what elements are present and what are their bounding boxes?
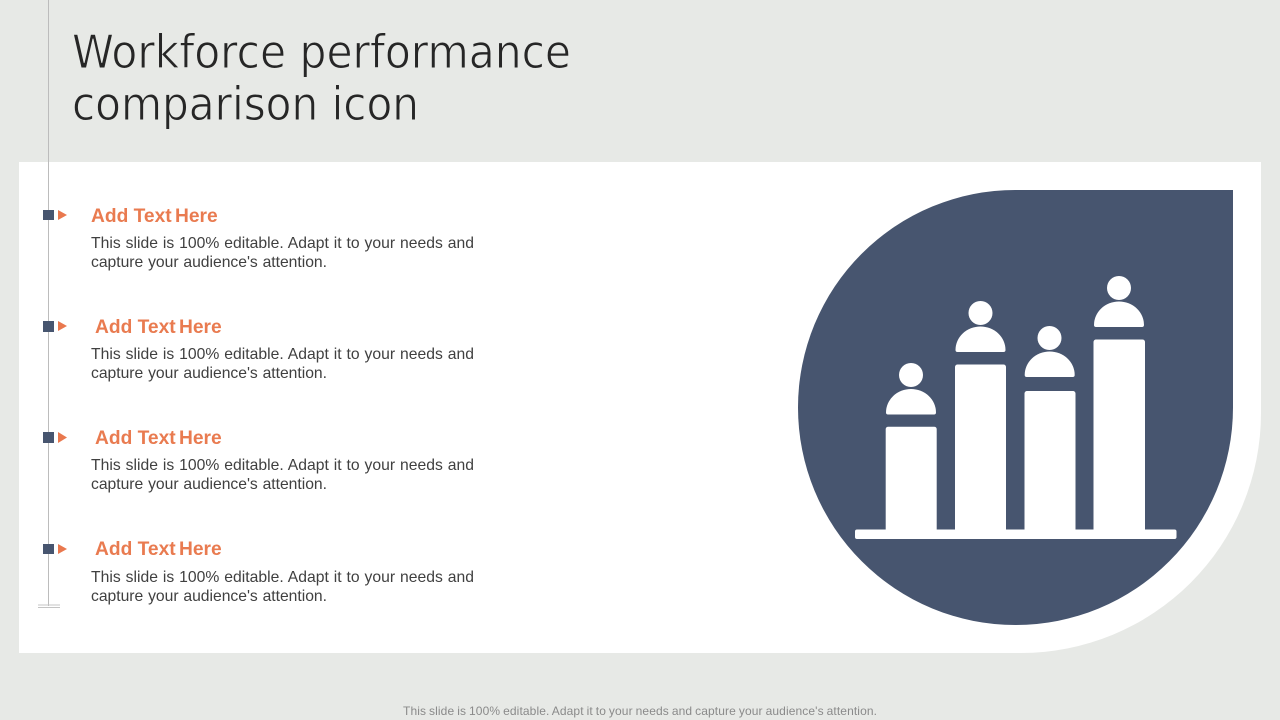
item 4 heading: Add Text Here [95,539,222,560]
item 2 marker [43,321,67,332]
bar 4 with person [1094,276,1145,532]
list item 1 [43,206,474,271]
icon: workforce performance bars with people [855,276,1176,539]
item 4 body: capture your audience's attention. [91,588,327,605]
item 3 body: capture your audience's attention. [91,476,327,493]
bar 2 with person [955,301,1006,532]
title [72,25,571,131]
item 2 body: capture your audience's attention. [91,365,327,382]
bar 1 with person [886,363,937,533]
title: Workforce performance [72,25,571,79]
item 2 body [91,346,474,382]
item 2 heading: Add Text Here [95,317,222,338]
title: comparison icon [72,77,419,131]
item 4 body: This slide is 100% editable. Adapt it to your needs and [91,569,474,586]
item 3 body: This slide is 100% editable. Adapt it to your needs and [91,457,474,474]
item 3 body [91,457,474,493]
baseline [855,530,1176,539]
list item 4 [43,539,474,605]
panel: white content card [19,162,1261,653]
item 2 body: This slide is 100% editable. Adapt it to your needs and [91,346,474,363]
bar 3 with person [1024,326,1076,533]
footer note: This slide is 100% editable. Adapt it to your needs and capture your audience's attention. [403,704,877,718]
item 4 body [91,569,474,605]
item 1 marker [43,210,67,220]
list item 2 [43,317,474,382]
item 3 heading: Add Text Here [95,428,222,449]
timeline vertical line [38,0,60,608]
item 1 body: capture your audience's attention. [91,254,327,271]
item 1 heading: Add Text Here [91,206,218,227]
item 3 marker [43,432,67,443]
panel: blue leaf shape [798,190,1233,625]
item 1 body: This slide is 100% editable. Adapt it to your needs and [91,235,474,252]
item 1 body [91,235,474,271]
item 4 marker [43,544,67,554]
list item 3 [43,428,474,493]
